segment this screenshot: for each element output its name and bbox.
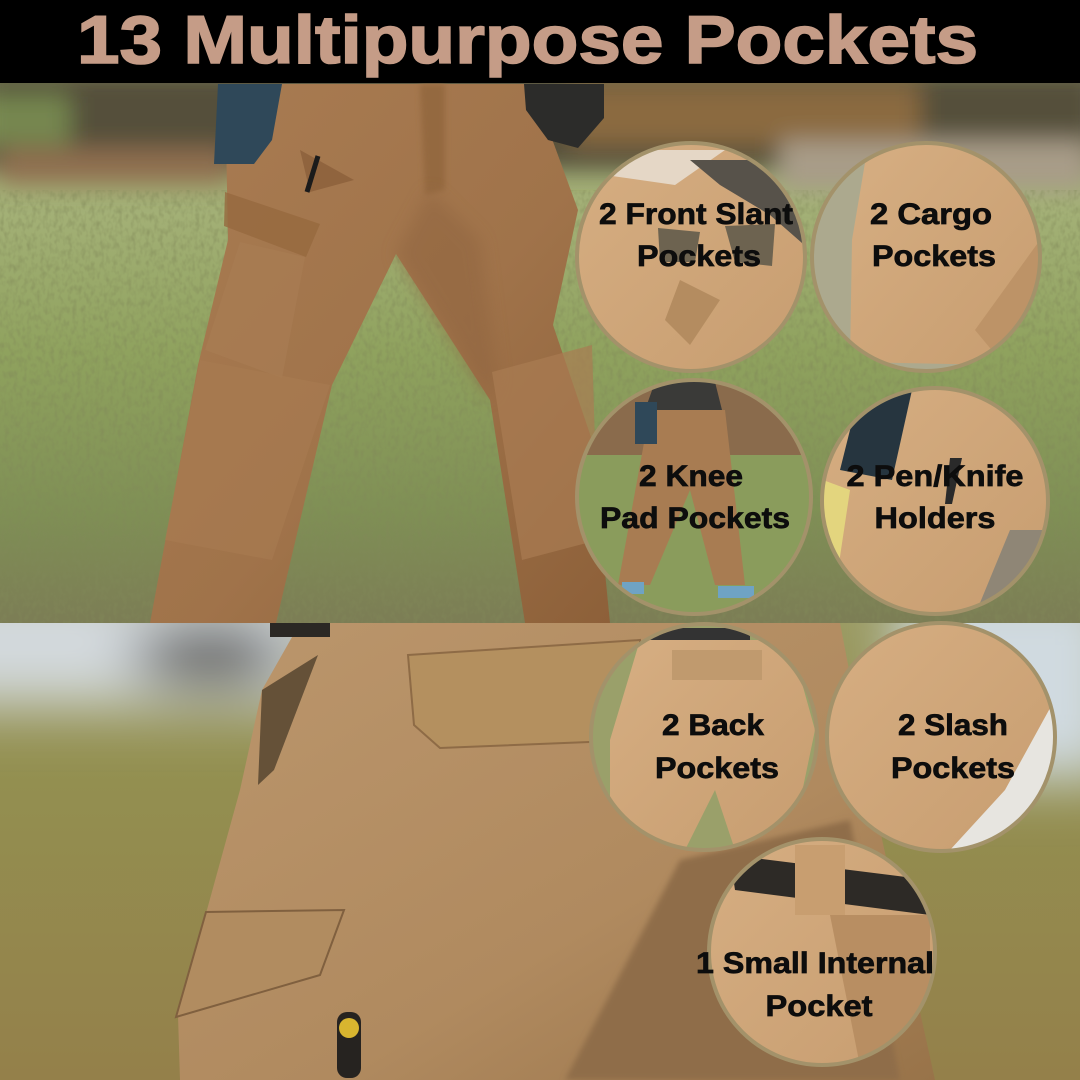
label: 2 Cargo xyxy=(870,198,992,231)
circle: front slant pockets xyxy=(570,140,810,380)
trouser close-up xyxy=(178,623,935,1080)
title: 13 Multipurpose Pockets xyxy=(77,2,978,78)
circle: knee pad pockets: Pad Pockets xyxy=(600,502,790,535)
circle: cargo pockets xyxy=(810,140,1045,375)
trousers xyxy=(150,84,610,623)
circle: small internal pocket: Pocket xyxy=(766,990,872,1023)
circle: cargo pockets: Pockets xyxy=(872,240,996,273)
circle: back pockets xyxy=(590,623,820,853)
label: 2 Knee xyxy=(639,460,743,493)
label: 1 Small Internal xyxy=(696,947,934,980)
circle: front slant pockets: Pockets xyxy=(637,240,761,273)
circle: slash pockets: Pockets xyxy=(891,752,1015,785)
label: 2 Front Slant xyxy=(599,198,793,231)
header band xyxy=(0,0,1080,84)
label: 2 Pen/Knife xyxy=(846,460,1024,493)
circle: pen and knife holders: Holders xyxy=(874,502,996,535)
bottom photo: close-up xyxy=(0,580,1080,1080)
circle: pen and knife holders xyxy=(820,385,1050,615)
top photo: field and trousers xyxy=(0,70,1080,623)
label: 2 Back xyxy=(662,709,764,742)
circle: small internal pocket xyxy=(696,838,936,1066)
circle: back pockets: Pockets xyxy=(655,752,779,785)
label: 2 Slash xyxy=(898,709,1008,742)
work label xyxy=(337,1012,361,1078)
circle: slash pockets xyxy=(825,622,1060,854)
holster and ear protection xyxy=(214,84,604,164)
circle: knee pad pockets xyxy=(575,378,815,625)
